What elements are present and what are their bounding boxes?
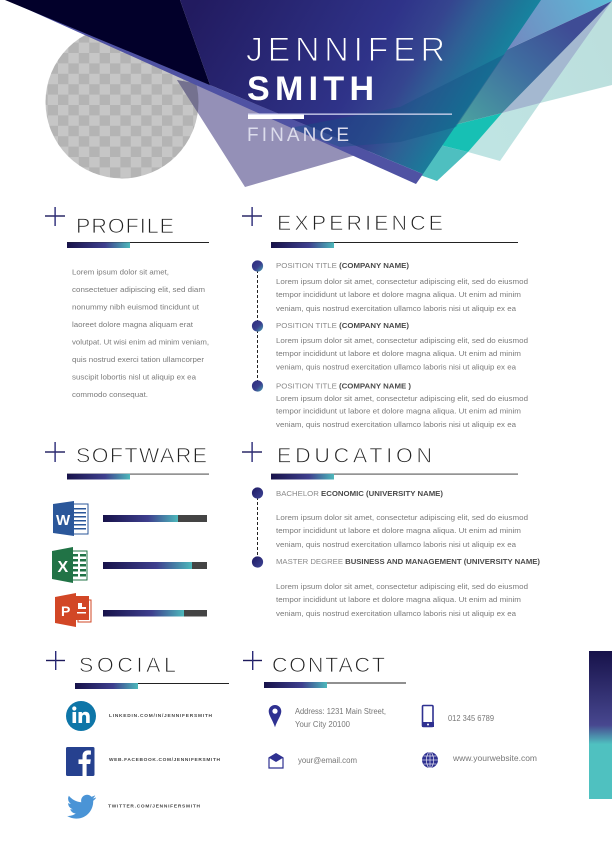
- text: address: [295, 707, 386, 729]
- job 1: veniam, quis nostrud exercitation ullamco laboris nisi ut aliquip ex ea: [276, 304, 517, 313]
- panel: contact: [243, 651, 537, 768]
- panel: profile: [45, 207, 209, 399]
- degree 1: BACHELOR ECONOMIC (UNIVERSITY NAME): [276, 489, 443, 498]
- icon: plus: [45, 207, 65, 226]
- heading: profile: PROFILE: [76, 214, 174, 238]
- photo placeholder circle: [46, 26, 198, 178]
- heading: education: EDUCATION: [277, 444, 432, 468]
- panel: social: [46, 651, 229, 819]
- heading: experience: EXPERIENCE: [277, 211, 443, 235]
- job 2: POSITION TITLE (COMPANY NAME): [276, 321, 409, 330]
- title: name and role: JENNIFER: [246, 31, 445, 69]
- heading rule: [67, 474, 209, 480]
- text: facebook url: WEB.FACEBOOK.COM/JENNIFERSMITH: [109, 757, 221, 763]
- profile text: consectetuer adipiscing elit, sed diam: [72, 285, 205, 294]
- header geometric shapes: [5, 0, 612, 187]
- profile text: Lorem ipsum dolor sit amet,: [72, 268, 169, 276]
- icon: plus: [242, 207, 262, 226]
- degree 2: Lorem ipsum dolor sit amet, consectetur adipiscing elit, sed do eiusmod: [276, 582, 528, 591]
- degree 2: tempor incididunt ut labore et dolore magna aliqua. Ut enim ad minim: [276, 595, 521, 604]
- panel: software: [45, 442, 209, 627]
- heading: contact: CONTACT: [272, 653, 385, 677]
- job 3: Lorem ipsum dolor sit amet, consectetur adipiscing elit, sed do eiusmod: [276, 394, 528, 403]
- icon: mail: [268, 753, 284, 768]
- job 1: POSITION TITLE (COMPANY NAME): [276, 261, 409, 270]
- icon: plus: [242, 442, 262, 462]
- job 1: [276, 261, 528, 313]
- degree 1: veniam, quis nostrud exercitation ullamco laboris nisi ut aliquip ex ea: [276, 540, 517, 549]
- icon: word: [53, 501, 88, 536]
- job 3: POSITION TITLE (COMPANY NAME ): [276, 382, 411, 390]
- profile text: suscipit lobortis nisl ut aliquip ex ea: [72, 372, 197, 382]
- job 3: veniam, quis nostrud exercitation ullamco laboris nisi ut aliquip ex ea: [276, 420, 517, 429]
- panel: experience: [242, 207, 528, 429]
- icon: globe: [422, 752, 438, 768]
- heading: social: SOCIAL: [79, 653, 176, 677]
- icon: pin: [269, 705, 281, 727]
- job 1: tempor incididunt ut labore et dolore magna aliqua. Ut enim ad minim: [276, 290, 521, 299]
- panel: education: [242, 442, 540, 618]
- heading rule: [75, 683, 229, 689]
- text: email: your@email.com: [298, 756, 357, 765]
- text: twitter url: TWITTER.COM/JENNIFERSMITH: [108, 804, 201, 810]
- icon: plus: [243, 651, 262, 670]
- heading rule: [271, 242, 518, 248]
- icon: excel: X: [58, 559, 68, 576]
- text: phone: 012 345 6789: [448, 714, 495, 723]
- degree 1: Lorem ipsum dolor sit amet, consectetur adipiscing elit, sed do eiusmod: [276, 513, 528, 522]
- job 3: tempor incididunt ut labore et dolore magna aliqua. Ut enim ad minim: [276, 406, 521, 416]
- job 2: tempor incididunt ut labore et dolore magna aliqua. Ut enim ad minim: [276, 349, 521, 358]
- heading rule: [271, 474, 518, 480]
- icon: linkedin: [66, 701, 96, 731]
- title: name and role: SMITH: [247, 70, 374, 108]
- title: name and role: [246, 31, 452, 146]
- text: website: www.yourwebsite.com: [452, 754, 537, 763]
- degree 2: veniam, quis nostrud exercitation ullamco laboris nisi ut aliquip ex ea: [276, 609, 517, 618]
- profile text: volutpat. Ut wisi enim ad minim veniam,: [72, 338, 209, 346]
- title: name and role: FINANCE: [247, 125, 349, 146]
- degree 2: MASTER DEGREE BUSINESS AND MANAGEMENT (UNIVERSITY NAME): [276, 557, 540, 566]
- icon: word: W: [56, 512, 71, 529]
- degree 2: [276, 557, 540, 618]
- icon: plus: [45, 442, 65, 462]
- skill bar: word: [103, 515, 207, 522]
- job 2: Lorem ipsum dolor sit amet, consectetur adipiscing elit, sed do eiusmod: [276, 336, 528, 345]
- heading rule: [67, 242, 209, 248]
- icon: powerpoint: [55, 593, 91, 627]
- text: address: Your City 20100: [295, 720, 351, 729]
- icon: excel: [52, 547, 87, 583]
- profile text: laoreet dolore magna aliquam erat: [72, 320, 193, 329]
- timeline: [252, 260, 263, 392]
- timeline: [252, 487, 263, 568]
- degree 1: [276, 489, 528, 549]
- heading: software: SOFTWARE: [76, 444, 207, 468]
- icon: plus: [46, 651, 65, 670]
- skill bar: powerpoint: [103, 610, 207, 616]
- skill bar: excel: [103, 562, 207, 569]
- job 2: veniam, quis nostrud exercitation ullamco laboris nisi ut aliquip ex ea: [276, 362, 517, 372]
- profile text: commodo consequat.: [72, 390, 148, 399]
- text: address: Address: 1231 Main Street,: [295, 707, 386, 716]
- profile text: nonummy nibh euismod tincidunt ut: [72, 302, 199, 312]
- profile text: [72, 268, 209, 399]
- icon: powerpoint: P: [61, 603, 70, 619]
- icon: phone: [422, 706, 434, 727]
- heading rule: [264, 682, 406, 688]
- job 3: [276, 382, 528, 429]
- degree 1: tempor incididunt ut labore et dolore magna aliqua. Ut enim ad minim: [276, 526, 521, 535]
- icon: twitter: [67, 795, 96, 819]
- text: linkedin url: LINKEDIN.COM/IN/JENNIFERSMITH: [109, 713, 213, 719]
- decorative side bar: [589, 651, 612, 799]
- icon: facebook: [66, 747, 94, 776]
- profile text: quis nostrud exerci tation ullamcorper: [72, 355, 205, 364]
- job 2: [276, 321, 528, 372]
- job 1: Lorem ipsum dolor sit amet, consectetur adipiscing elit, sed do eiusmod: [276, 277, 528, 286]
